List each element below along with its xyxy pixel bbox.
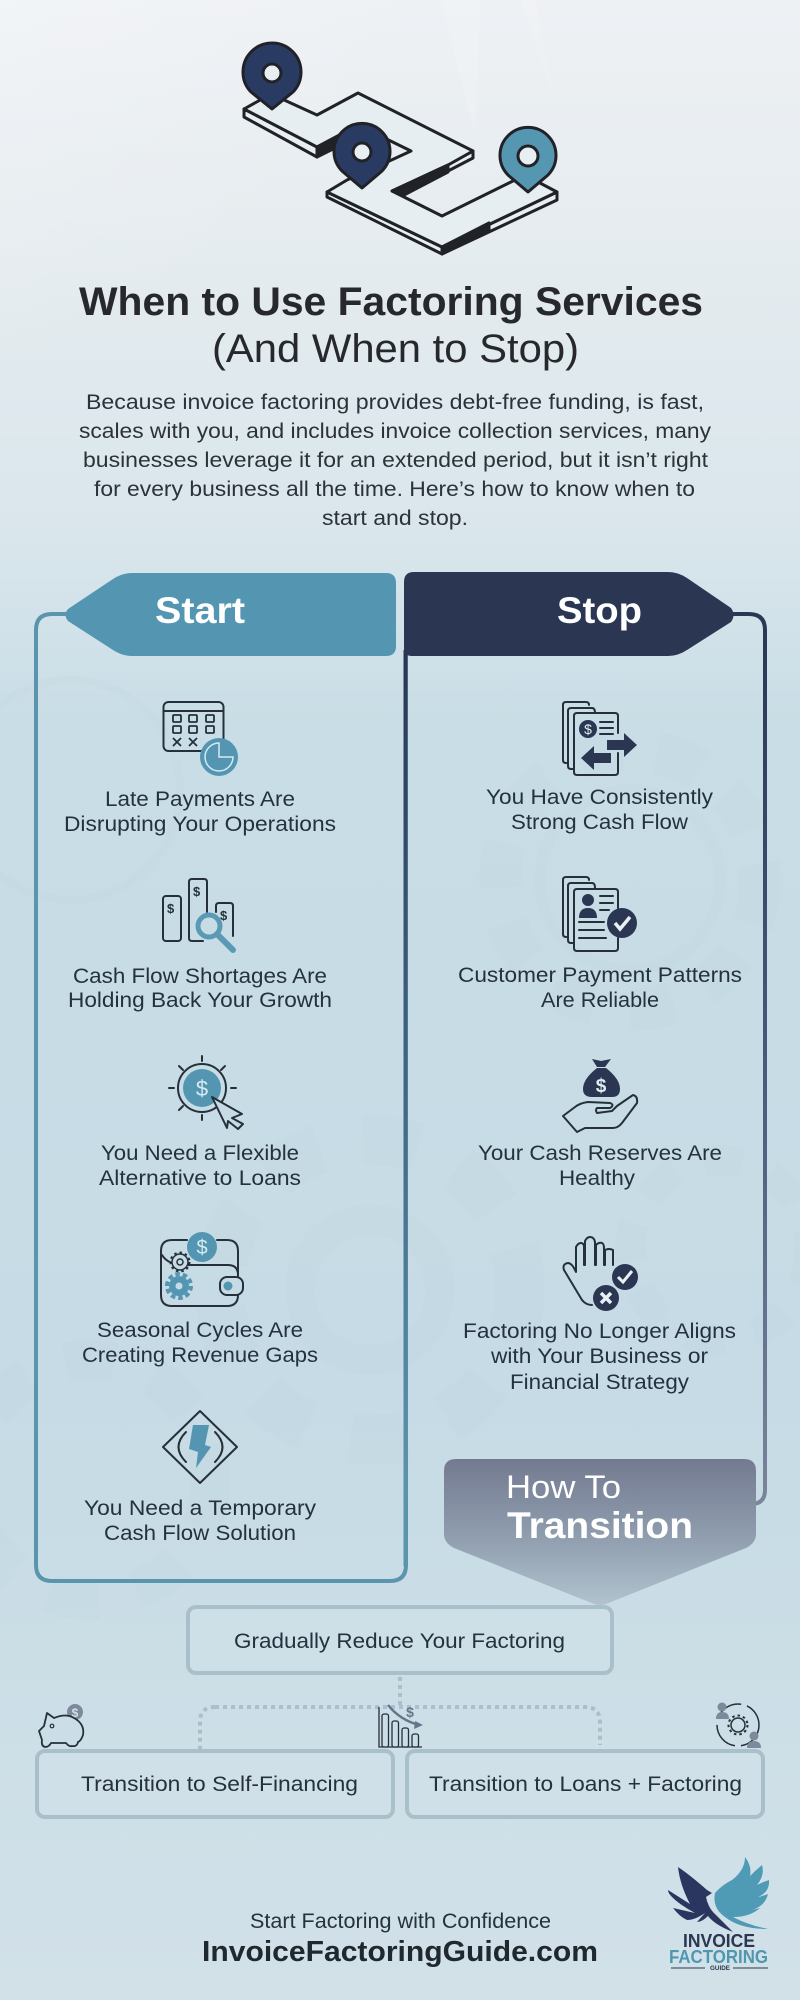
item: cash reserves: Your Cash Reserves Are [478, 1141, 722, 1165]
intro paragraph: Because invoice factoring provides debt-free funding, is fast, [86, 390, 704, 414]
item: no longer aligned: Financial Strategy [510, 1370, 689, 1394]
item: cash flow shortages [68, 879, 332, 1012]
item: no longer aligned: Factoring No Longer Aligns [463, 1319, 736, 1343]
icon: dollar target with cursor [169, 1056, 243, 1129]
icon: cash bars with magnifier: $ [167, 901, 175, 916]
item: reliable patterns: Are Reliable [541, 988, 659, 1012]
box: gradually reduce [188, 1607, 612, 1673]
footer call to action: InvoiceFactoringGuide.com [202, 1936, 598, 1968]
box: self-financing [37, 1751, 393, 1817]
intro paragraph: for every business all the time. Here’s how to know when to [94, 477, 695, 501]
item: strong cash flow: You Have Consistently [486, 785, 713, 809]
icon: declining bar chart [379, 1704, 423, 1747]
path top surface [244, 93, 557, 247]
pin 2 [334, 123, 390, 188]
stop frame [406, 614, 765, 1566]
icon: wallet with gears and coin [161, 1232, 243, 1306]
logo: Invoice Factoring Guide: GUIDE [710, 1966, 730, 1972]
intro paragraph: start and stop. [322, 506, 468, 530]
item: temporary solution: You Need a Temporary [84, 1496, 316, 1520]
icon: declining bar chart: $ [406, 1704, 414, 1720]
box: self-financing: Transition to Self-Financing [81, 1772, 358, 1796]
item: seasonal cycles [82, 1232, 318, 1367]
item: strong cash flow: Strong Cash Flow [511, 810, 688, 834]
banner: how to transition [444, 1459, 756, 1605]
connector: dotted paths [200, 1677, 600, 1750]
logo: Invoice Factoring Guide [668, 1857, 769, 1972]
hero icon: winding map path with pins [243, 43, 557, 254]
box: gradually reduce: Gradually Reduce Your Factoring [234, 1629, 565, 1653]
icon: piggy bank: $ [72, 1706, 79, 1720]
item: no longer aligned [463, 1237, 736, 1394]
icon: people and gear cycle [716, 1702, 761, 1748]
icon: money bag on hand [563, 1059, 637, 1132]
pin 1 [243, 43, 301, 109]
item: strong cash flow [486, 702, 713, 834]
pin 3 [500, 127, 556, 192]
start frame [36, 614, 406, 1581]
item: cash flow shortages: Cash Flow Shortages Are [73, 964, 327, 988]
box: loans plus factoring: Transition to Loans + Factoring [429, 1772, 742, 1796]
stop banner: Stop [557, 590, 642, 631]
icon: cash bars with magnifier [163, 879, 233, 950]
title [79, 280, 703, 371]
icon: cash bars with magnifier: $ [193, 884, 201, 899]
start banner [66, 573, 396, 656]
icon: wallet with gears and coin: $ [196, 1237, 208, 1259]
panel: stop [404, 572, 765, 1566]
item: flexible alternative: Alternative to Loans [99, 1166, 301, 1190]
item: cash reserves: Healthy [559, 1166, 635, 1190]
platform thickness [244, 109, 557, 254]
footer call to action: Start Factoring with Confidence [250, 1909, 551, 1933]
item: flexible alternative [99, 1056, 301, 1190]
title: When to Use Factoring Services [79, 280, 703, 324]
icon: lightning bolt diamond [163, 1411, 237, 1483]
item: flexible alternative: You Need a Flexible [101, 1141, 299, 1165]
box: loans plus factoring [407, 1751, 763, 1817]
icon: calendar with clock [164, 702, 238, 776]
logo: Invoice Factoring Guide: INVOICE [683, 1931, 755, 1951]
icon: documents with arrows: $ [584, 721, 592, 737]
icon: documents with arrows [563, 702, 637, 775]
banner: how to transition: Transition [507, 1505, 693, 1546]
icon: cash bars with magnifier: $ [220, 908, 228, 923]
item: temporary solution [84, 1411, 316, 1545]
item: late payments: Disrupting Your Operations [64, 812, 336, 836]
title: (And When to Stop) [212, 327, 579, 371]
footer call to action [202, 1909, 598, 1968]
item: cash reserves [478, 1059, 722, 1190]
stop banner [404, 572, 734, 656]
intro paragraph: businesses leverage it for an extended period, but it isn’t right [83, 448, 708, 472]
item: late payments: Late Payments Are [105, 787, 295, 811]
icon: money bag on hand: $ [596, 1076, 607, 1097]
item: seasonal cycles: Creating Revenue Gaps [82, 1343, 318, 1367]
item: reliable patterns: Customer Payment Patterns [458, 963, 742, 987]
icon: piggy bank [39, 1704, 83, 1747]
item: no longer aligned: with Your Business or [490, 1344, 708, 1368]
panel: start [36, 573, 406, 1581]
item: temporary solution: Cash Flow Solution [104, 1521, 296, 1545]
icon: hand with check and x [564, 1237, 638, 1311]
start banner: Start [155, 590, 245, 631]
item: seasonal cycles: Seasonal Cycles Are [97, 1318, 303, 1342]
intro paragraph [79, 390, 711, 530]
logo: Invoice Factoring Guide: FACTORING [669, 1947, 768, 1967]
intro paragraph: scales with you, and includes invoice collection services, many [79, 419, 711, 443]
item: late payments [64, 702, 336, 836]
banner: how to transition: How To [506, 1469, 621, 1505]
item: cash flow shortages: Holding Back Your Growth [68, 988, 332, 1012]
item: reliable patterns [458, 877, 742, 1012]
icon: customer documents with check [563, 877, 637, 951]
icon: dollar target with cursor: $ [196, 1076, 208, 1101]
